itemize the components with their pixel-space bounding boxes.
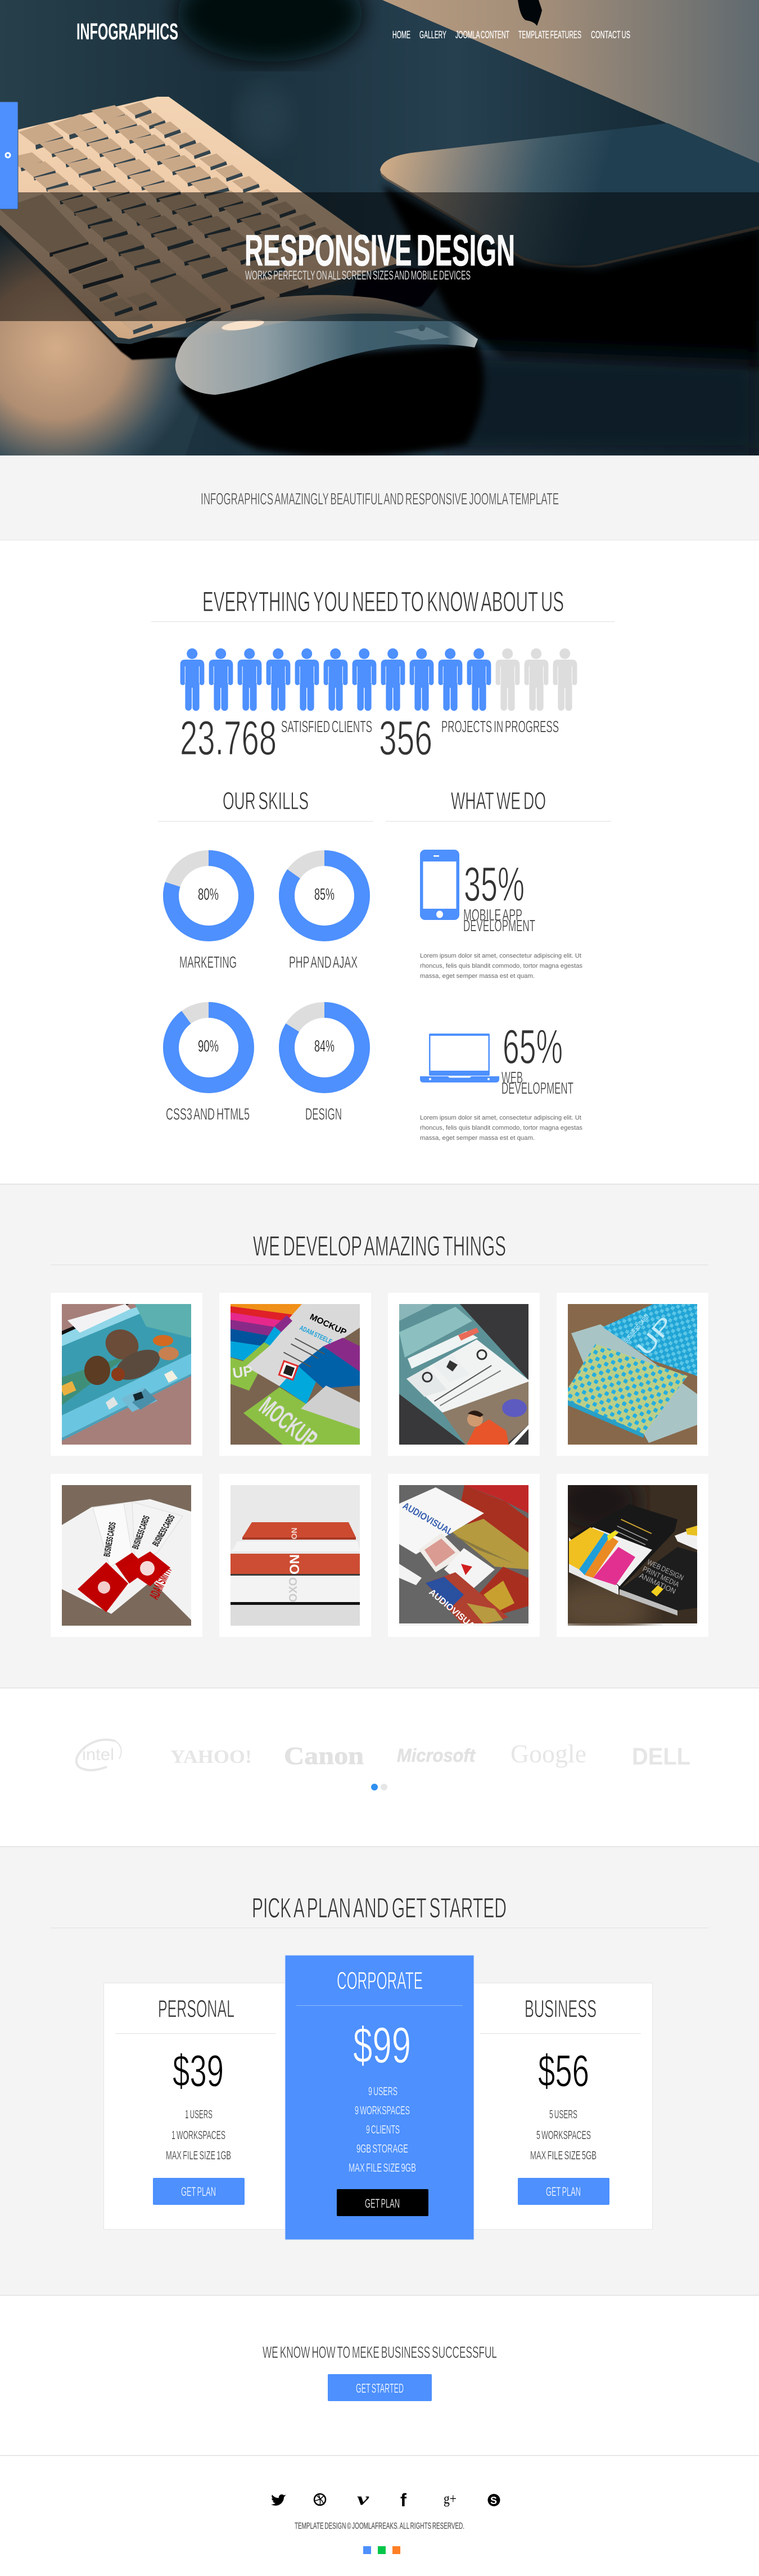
plan: personal: MAX FILE SIZE 1GB bbox=[166, 2149, 231, 2162]
logo: microsoft: Microsoft bbox=[397, 1745, 476, 1766]
cta button: GET STARTED bbox=[356, 2381, 404, 2395]
plan: corporate: CORPORATE bbox=[337, 1967, 423, 1995]
plan: personal: PERSONAL bbox=[158, 1995, 234, 2023]
card: black business cards: PRINT MEDIA bbox=[641, 1564, 681, 1589]
heading: WE DEVELOP AMAZING THINGS bbox=[253, 1230, 506, 1262]
navigation menu: TEMPLATE FEATURES bbox=[518, 29, 581, 40]
text: mobile description: rhoncus, felis quis blandit commodo, tortor magna egestas bbox=[420, 963, 582, 969]
navigation menu: HOME bbox=[392, 29, 410, 40]
carousel dots bbox=[371, 1784, 387, 1790]
card: audiovisual stationery: AUDIOVISUAL bbox=[401, 1500, 455, 1537]
panel: tagline strip bbox=[0, 455, 759, 540]
icon: skype bbox=[488, 2494, 500, 2506]
text: web description: rhoncus, felis quis blandit commodo, tortor magna egestas bbox=[420, 1125, 582, 1131]
card: orange notebooks: OXO bbox=[287, 1577, 300, 1602]
panel: client logos bbox=[0, 1688, 759, 1790]
plan: corporate: 9GB STORAGE bbox=[356, 2142, 408, 2155]
logo: intel bbox=[76, 1740, 121, 1770]
card: orange notebooks bbox=[219, 1474, 371, 1637]
dark translucent band bbox=[0, 192, 759, 321]
stat: mobile app development: 35% bbox=[464, 858, 525, 912]
hero photo: keyboard, mouse and monitor bbox=[0, 0, 759, 457]
people pictogram bbox=[180, 648, 577, 711]
donut: css3 and html5: CSS3 AND HTML5 bbox=[166, 1106, 250, 1124]
navigation menu: JOOMLA CONTENT bbox=[455, 29, 509, 40]
colour swatches bbox=[363, 2546, 400, 2554]
keyboard bbox=[0, 97, 401, 339]
stat: projects in progress bbox=[379, 711, 559, 765]
card: red business cards bbox=[51, 1474, 202, 1637]
plan: business: $56 bbox=[538, 2046, 589, 2096]
navigation menu: CONTACT US bbox=[591, 29, 630, 40]
card: business cards mockup: MOCKUP bbox=[308, 1312, 348, 1337]
icon: laptop bbox=[420, 1034, 499, 1082]
stat: mobile app development: MOBILE APP bbox=[463, 906, 522, 924]
icon: google plus: g+ bbox=[444, 2491, 457, 2507]
card: black business cards: WEB DESIGN bbox=[646, 1558, 685, 1582]
heading: our skills: OUR SKILLS bbox=[223, 787, 309, 815]
cta heading: WE KNOW HOW TO MEKE BUSINESS SUCCESSFUL bbox=[263, 2344, 497, 2362]
panel: pricing bbox=[0, 1846, 759, 2295]
icon: skype: S bbox=[490, 2495, 497, 2506]
plan: personal: 1 WORKSPACES bbox=[171, 2129, 225, 2142]
heading: PICK A PLAN AND GET STARTED bbox=[252, 1892, 507, 1924]
card: black business cards: ANIMATION bbox=[638, 1571, 677, 1595]
mouse bbox=[180, 343, 484, 457]
stat: satisfied clients: 23.768 bbox=[180, 711, 277, 765]
plan: personal: $39 bbox=[173, 2046, 224, 2096]
donut: marketing: MARKETING bbox=[179, 954, 237, 972]
logo: canon: Canon bbox=[284, 1742, 364, 1770]
donut: php and ajax: PHP AND AJAX bbox=[289, 954, 358, 972]
plan: business bbox=[427, 1983, 652, 2229]
stat: web development: WEB bbox=[502, 1069, 523, 1087]
stat: satisfied clients: SATISFIED CLIENTS bbox=[281, 718, 372, 736]
card: orange notebooks: ON bbox=[290, 1527, 299, 1540]
donut: php and ajax: 85% bbox=[314, 886, 335, 904]
heading: what we do: WHAT WE DO bbox=[451, 787, 546, 815]
donut: design bbox=[287, 1010, 362, 1124]
card: business cards mockup bbox=[219, 1293, 371, 1456]
card: audiovisual stationery bbox=[388, 1474, 540, 1637]
plan: business: BUSINESS bbox=[525, 1995, 597, 2023]
copyright: TEMPLATE DESIGN © JOOMLAFREAKS. ALL RIGHTS RESERVED. bbox=[295, 2521, 464, 2531]
plan: corporate: $99 bbox=[353, 2018, 411, 2074]
text: web description: massa, eget semper massa est et quam. bbox=[420, 1135, 535, 1142]
card: business cards mockup: UP bbox=[232, 1362, 254, 1382]
logo: yahoo: YAHOO! bbox=[170, 1747, 252, 1767]
icon: facebook: f bbox=[400, 2490, 406, 2510]
donut: css3 and html5: 90% bbox=[198, 1037, 219, 1055]
text: mobile description: massa, eget semper massa est et quam. bbox=[420, 973, 535, 980]
card: orange notebooks: ON bbox=[287, 1554, 302, 1575]
icon: vimeo: v bbox=[357, 2488, 369, 2509]
side settings tab bbox=[0, 102, 18, 209]
card: web design tablet bbox=[388, 1293, 540, 1456]
donut: marketing: 80% bbox=[198, 886, 219, 904]
donut: marketing bbox=[171, 858, 246, 972]
stat: projects in progress: 356 bbox=[379, 711, 432, 765]
text: web description: Lorem ipsum dolor sit amet, consectetur adipiscing elit. Ut bbox=[420, 1115, 581, 1121]
stat: web development: DEVELOPMENT bbox=[502, 1080, 573, 1098]
plan: personal bbox=[103, 1983, 328, 2229]
card: black business cards bbox=[551, 1468, 708, 1637]
text: mobile description: Lorem ipsum dolor sit amet, consectetur adipiscing elit. Ut bbox=[420, 953, 581, 959]
plan: corporate: GET PLAN bbox=[365, 2196, 400, 2210]
plan: corporate: MAX FILE SIZE 9GB bbox=[349, 2162, 416, 2175]
plan: business: 5 USERS bbox=[549, 2108, 577, 2121]
navigation menu: GALLERY bbox=[419, 29, 446, 40]
icon: dribbble bbox=[314, 2494, 326, 2505]
plan: corporate: 9 USERS bbox=[368, 2085, 397, 2098]
plan: personal: GET PLAN bbox=[181, 2185, 216, 2199]
icon: phone bbox=[420, 850, 459, 920]
panel: about us bbox=[151, 586, 615, 1142]
donut: css3 and html5 bbox=[166, 1010, 250, 1124]
hero subtitle: WORKS PERFECTLY ON ALL SCREEN SIZES AND MOBILE DEVICES bbox=[245, 268, 471, 282]
card: tablet mockup bbox=[51, 1293, 202, 1456]
donut: php and ajax bbox=[287, 858, 362, 972]
logo: google: Google bbox=[510, 1739, 586, 1768]
cta button bbox=[328, 2374, 432, 2401]
plan: personal: 1 USERS bbox=[185, 2108, 213, 2121]
plan: business: MAX FILE SIZE 5GB bbox=[530, 2149, 597, 2162]
panel: call to action bbox=[0, 2344, 759, 2456]
logo: intel: intel bbox=[82, 1745, 114, 1764]
text: web description bbox=[420, 1115, 582, 1142]
plan: corporate: 9 CLIENTS bbox=[366, 2123, 400, 2136]
stat: mobile app development bbox=[463, 858, 535, 935]
donut: design: DESIGN bbox=[305, 1106, 342, 1124]
plan: corporate: 9 WORKSPACES bbox=[355, 2104, 410, 2117]
panel: footer bbox=[271, 2488, 500, 2554]
hero heading: RESPONSIVE DESIGN bbox=[245, 225, 515, 275]
plan: business: 5 WORKSPACES bbox=[536, 2129, 591, 2142]
card: patterned business cards: UP bbox=[632, 1312, 679, 1361]
panel: hero bbox=[0, 0, 759, 457]
site logo: INFOGRAPHICS bbox=[76, 19, 178, 44]
card: patterned business cards bbox=[557, 1293, 708, 1456]
card: business cards mockup: ADAM STEELE bbox=[299, 1324, 333, 1346]
icon: twitter bbox=[271, 2494, 286, 2506]
stat: web development: 65% bbox=[503, 1020, 563, 1074]
logo: dell: DELL bbox=[632, 1743, 690, 1770]
panel: portfolio bbox=[0, 1184, 759, 1688]
donut: design: 84% bbox=[314, 1037, 335, 1055]
stat: projects in progress: PROJECTS IN PROGRESS bbox=[441, 718, 559, 736]
text: mobile description bbox=[420, 953, 582, 980]
plan: business: GET PLAN bbox=[546, 2185, 581, 2199]
iMac back and stand bbox=[382, 0, 759, 163]
stat: web development bbox=[502, 1020, 573, 1098]
card: audiovisual stationery: AUDIOVISUAL bbox=[427, 1587, 481, 1635]
navigation menu bbox=[392, 29, 630, 40]
plan: corporate bbox=[285, 1955, 474, 2240]
stat: mobile app development: DEVELOPMENT bbox=[463, 917, 535, 935]
